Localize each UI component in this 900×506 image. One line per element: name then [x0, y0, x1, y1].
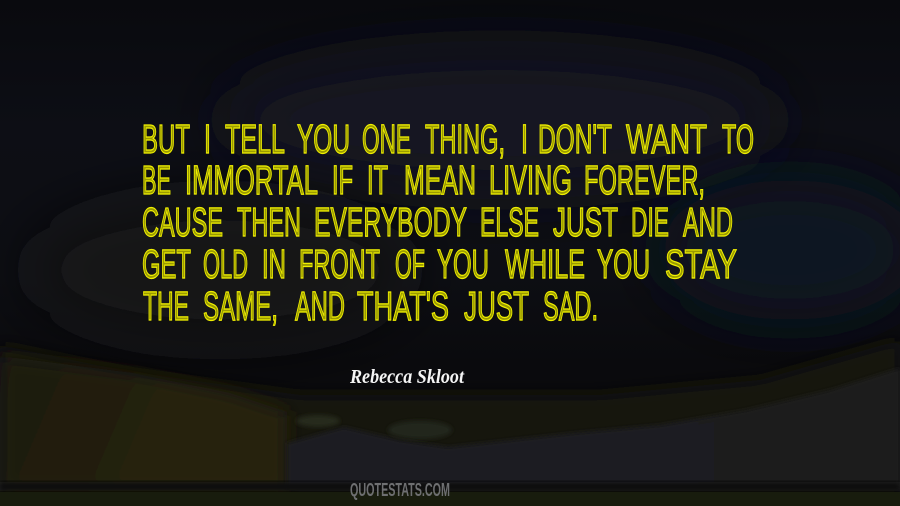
- quote line 3: AND: [683, 199, 733, 245]
- quote line 1: [142, 116, 754, 162]
- quote line 1: DON'T: [538, 116, 612, 162]
- quote line 3: ELSE: [480, 199, 539, 245]
- quote line 4: OF: [395, 241, 425, 287]
- quote line 3: [142, 199, 733, 245]
- quote line 4: WHILE: [505, 241, 585, 287]
- quote line 5: AND: [295, 283, 345, 329]
- quote line 5: [143, 283, 598, 329]
- quote line 4: FRONT: [299, 241, 380, 287]
- quote line 1: ONE: [362, 116, 411, 162]
- quote line 4: [142, 241, 737, 287]
- quote line 2: IT: [367, 157, 388, 203]
- quote line 5: JUST: [464, 283, 529, 329]
- quote line 3: JUST: [553, 199, 618, 245]
- quote line 4: YOU: [597, 241, 650, 287]
- quote line 3: CAUSE: [142, 199, 223, 245]
- quote line 4: STAY: [665, 241, 737, 287]
- quote line 1: I: [521, 116, 528, 162]
- quote line 4: YOU: [437, 241, 489, 287]
- quote line 5: SAD.: [543, 283, 598, 329]
- quote line 5: THAT'S: [357, 283, 449, 329]
- quote line 5: THE: [143, 283, 189, 329]
- quote text: [142, 116, 754, 329]
- quote line 1: TELL: [225, 116, 285, 162]
- quote line 1: THING,: [425, 116, 505, 162]
- quote line 2: IF: [332, 157, 353, 203]
- quote line 1: BUT: [142, 116, 190, 162]
- quote line 2: IMMORTAL: [185, 157, 318, 203]
- quote line 3: THEN: [237, 199, 301, 245]
- quote line 2: MEAN: [404, 157, 476, 203]
- quote line 1: TO: [722, 116, 754, 162]
- quote line 2: FOREVER,: [584, 157, 705, 203]
- quote line 4: IN: [262, 241, 286, 287]
- quote line 4: GET: [142, 241, 191, 287]
- quote line 5: SAME,: [203, 283, 278, 329]
- quote line 2: BE: [142, 157, 171, 203]
- quote line 4: OLD: [203, 241, 248, 287]
- quote line 1: YOU: [297, 116, 350, 162]
- quote line 2: LIVING: [489, 157, 572, 203]
- quote line 2: [142, 157, 705, 203]
- quote line 3: DIE: [631, 199, 669, 245]
- quote line 1: WANT: [626, 116, 707, 162]
- quote line 3: EVERYBODY: [314, 199, 467, 245]
- quote line 1: I: [204, 116, 211, 162]
- author name: Rebecca Skloot: [349, 366, 465, 388]
- watermark: QUOTESTATS.COM: [350, 480, 450, 500]
